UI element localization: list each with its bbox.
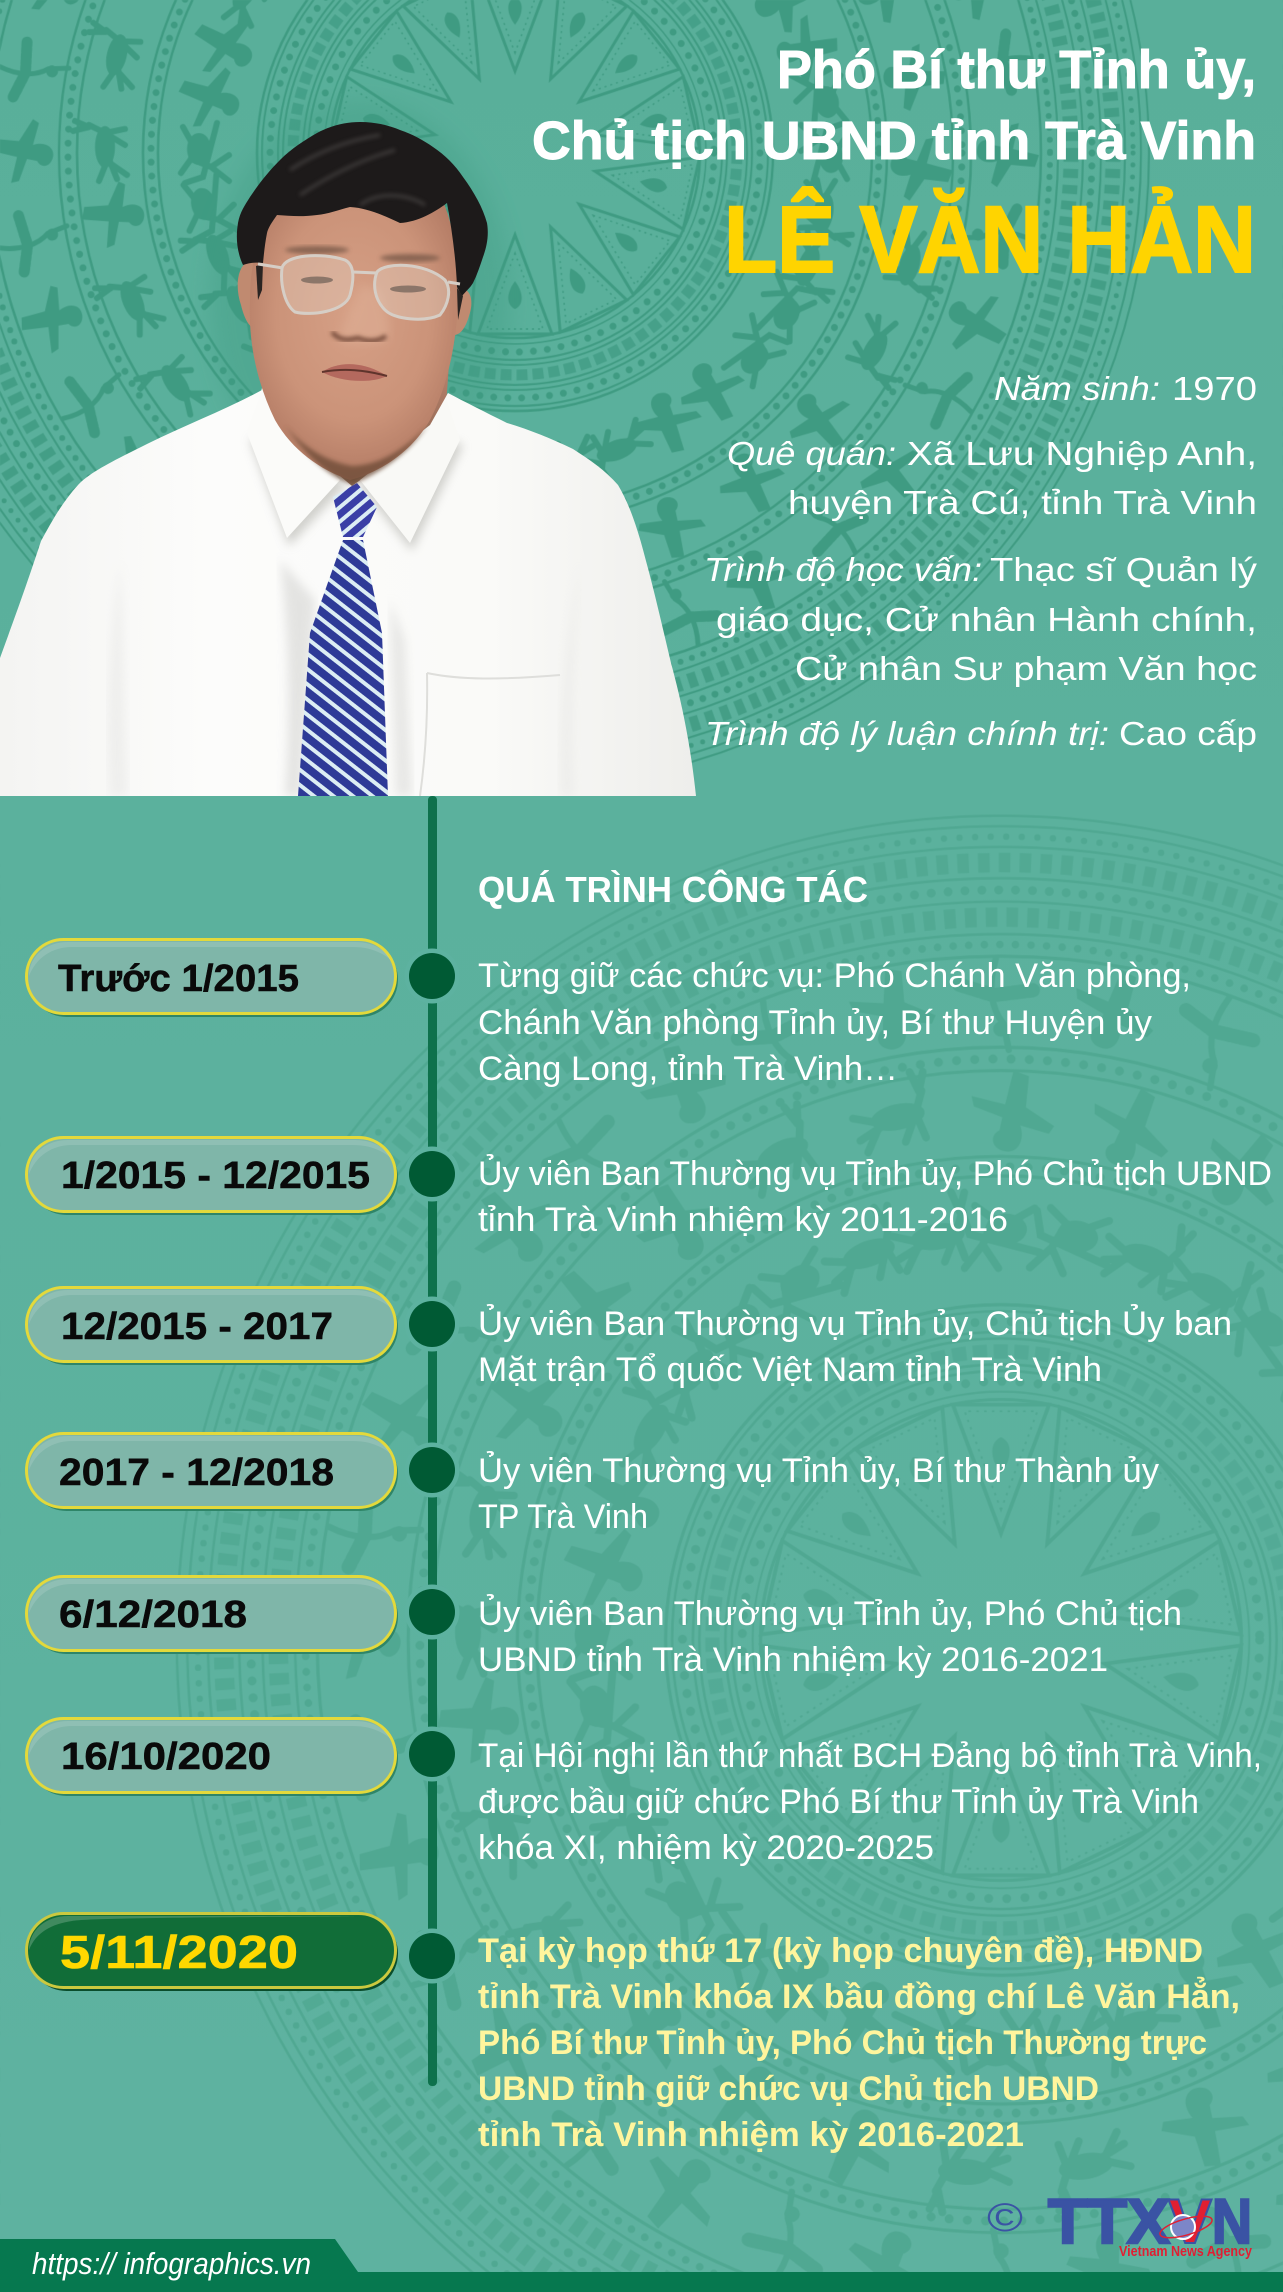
description: Càng Long, tỉnh Trà Vinh… [478, 1050, 898, 1088]
logo globe [1158, 2212, 1214, 2242]
description highlighted: Tại kỳ họp thứ 17 (kỳ họp chuyên đề), HĐND [478, 1932, 1203, 1970]
striped tie [298, 483, 388, 796]
description [478, 1305, 1232, 1389]
timeline dot [404, 1146, 460, 1202]
collar shadow [250, 430, 463, 551]
personal information block [704, 370, 1258, 752]
title [532, 40, 1256, 293]
heading: work history: QUÁ TRÌNH CÔNG TÁC [478, 868, 868, 910]
timeline entry 1 [26, 940, 1191, 1088]
date pill [26, 940, 398, 1017]
eyes [301, 276, 426, 292]
eyebrows [285, 246, 440, 262]
political theory level [705, 715, 1257, 752]
description highlighted: tỉnh Trà Vinh nhiệm kỳ 2016-2021 [478, 2116, 1024, 2154]
white shirt [0, 390, 696, 796]
date pill [26, 1138, 398, 1215]
timeline dot [404, 1726, 460, 1782]
date pill highlighted: 5/11/2020 [60, 1926, 298, 1978]
date pill [26, 1718, 398, 1796]
description highlighted: tỉnh Trà Vinh khóa IX bầu đồng chí Lê Văn Hẳn, [478, 1977, 1240, 2016]
birth year [994, 370, 1257, 407]
description: tỉnh Trà Vinh nhiệm kỳ 2011-2016 [478, 1201, 1008, 1239]
description: Ủy viên Ban Thường vụ Tỉnh ủy, Chủ tịch Ủy ban [478, 1305, 1232, 1343]
political theory level: Cao cấp [1119, 715, 1257, 752]
birth year: Năm sinh: [994, 370, 1160, 407]
political theory level: Trình độ lý luận chính trị: [705, 715, 1109, 752]
hometown: Xã Lưu Nghiệp Anh, [907, 435, 1257, 472]
birth year: 1970 [1172, 370, 1257, 407]
date pill: 16/10/2020 [61, 1736, 271, 1778]
description: Chánh Văn phòng Tỉnh ủy, Bí thư Huyện ủy [478, 1004, 1152, 1042]
description [478, 1737, 1262, 1867]
glasses [258, 256, 460, 319]
date pill [26, 1288, 398, 1365]
face [250, 194, 458, 480]
logo: TTXVN: N [1212, 2187, 1252, 2257]
mouth [322, 364, 387, 381]
date pill: 12/2015 - 2017 [61, 1306, 333, 1348]
description: Ủy viên Thường vụ Tỉnh ủy, Bí thư Thành ủy [478, 1452, 1159, 1490]
portrait soft shadow [220, 111, 500, 406]
chin shadow [285, 425, 428, 484]
timeline entry 3 [26, 1288, 1232, 1389]
education [704, 551, 1258, 687]
description: Mặt trận Tổ quốc Việt Nam tỉnh Trà Vinh [478, 1351, 1102, 1389]
title line 2: Chủ tịch UBND tỉnh Trà Vinh [532, 111, 1256, 171]
description [478, 1155, 1272, 1239]
description: Từng giữ các chức vụ: Phó Chánh Văn phòng, [478, 957, 1191, 995]
timeline line [428, 796, 437, 2086]
timeline dot [404, 1584, 460, 1640]
description highlighted: Phó Bí thư Tỉnh ủy, Phó Chủ tịch Thường trực [478, 2024, 1207, 2062]
portrait photo of Lê Văn Hẳn [0, 100, 696, 796]
date pill highlighted [26, 1914, 398, 1991]
copyright symbol: © [987, 2196, 1023, 2240]
timeline dot [404, 1928, 460, 1984]
description: khóa XI, nhiệm kỳ 2020-2025 [478, 1829, 934, 1867]
nose [332, 285, 389, 344]
timeline entry 7: highlighted [26, 1914, 1240, 2154]
hair [237, 122, 488, 320]
description: TP Trà Vinh [478, 1498, 648, 1536]
description: được bầu giữ chức Phó Bí thư Tỉnh ủy Trà Vinh [478, 1783, 1199, 1821]
date pill: Trước 1/2015 [58, 958, 299, 1000]
education: giáo dục, Cử nhân Hành chính, [716, 601, 1257, 638]
date pill: 6/12/2018 [59, 1594, 247, 1636]
description: Tại Hội nghị lần thứ nhất BCH Đảng bộ tỉnh Trà Vinh, [478, 1737, 1262, 1775]
description highlighted [478, 1932, 1240, 2154]
timeline entry 2 [26, 1138, 1272, 1239]
education: Thạc sĩ Quản lý [990, 551, 1258, 588]
logo: TTXVN [1048, 2187, 1253, 2260]
date pill [26, 1434, 398, 1511]
hometown: Quê quán: [727, 435, 896, 472]
timeline entry 4 [26, 1434, 1159, 1536]
education: Cử nhân Sư phạm Văn học [795, 650, 1257, 687]
description: Ủy viên Ban Thường vụ Tỉnh ủy, Phó Chủ tịch [478, 1595, 1182, 1633]
shirt collar [247, 388, 460, 543]
timeline dot [404, 1442, 460, 1498]
description [478, 957, 1191, 1088]
date pill [26, 1576, 398, 1654]
logo tagline: Vietnam News Agency [1119, 2243, 1253, 2260]
description highlighted: UBND tỉnh giữ chức vụ Chủ tịch UBND [478, 2070, 1099, 2108]
timeline dot [404, 948, 460, 1004]
neck [262, 368, 449, 486]
ears [238, 260, 471, 335]
footer bar [0, 2239, 1283, 2292]
footer url: https:// infographics.vn [32, 2246, 311, 2281]
education: Trình độ học vấn: [704, 551, 982, 588]
description [478, 1452, 1159, 1536]
hometown [727, 435, 1257, 521]
description: UBND tỉnh Trà Vinh nhiệm kỳ 2016-2021 [478, 1641, 1108, 1679]
description: Ủy viên Ban Thường vụ Tỉnh ủy, Phó Chủ tịch UBND [478, 1155, 1272, 1193]
hometown: huyện Trà Cú, tỉnh Trà Vinh [788, 484, 1257, 521]
date pill: 2017 - 12/2018 [59, 1452, 334, 1494]
logo: TTXVN: TTX [1048, 2187, 1170, 2257]
background pattern: upper bronze drum [0, 0, 1283, 800]
timeline entry 6 [26, 1718, 1262, 1867]
background pattern: lower bronze drum [0, 800, 1283, 2292]
timeline dot [404, 1296, 460, 1352]
timeline entry 5 [26, 1576, 1182, 1679]
description [478, 1595, 1182, 1679]
title line 1: Phó Bí thư Tỉnh ủy, [777, 40, 1256, 100]
logo: TTXVN: V [1168, 2187, 1212, 2257]
date pill: 1/2015 - 12/2015 [61, 1155, 370, 1197]
